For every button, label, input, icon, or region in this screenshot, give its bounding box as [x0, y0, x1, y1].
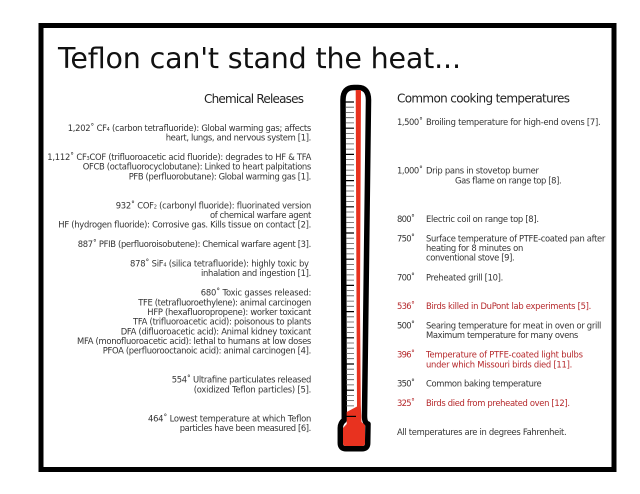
heading: cooking temperatures: Common cooking temperatures	[397, 92, 570, 106]
entry: 1,000 degrees	[397, 166, 562, 185]
footnote: All temperatures are in degrees Fahrenheit.	[397, 427, 567, 437]
entry: 554 degrees	[172, 375, 311, 394]
bottom tick on bulb	[346, 415, 356, 417]
entry: 1,112 degrees: OFCB (octafluorocyclobutane): Linked to heart palpitations	[83, 162, 311, 172]
entry: 680 degrees: DFA (difluoroacetic acid): Animal kidney toxicant	[121, 326, 312, 336]
entry: 750 degrees: conventional stove [9].	[426, 253, 515, 263]
entry: 396 degrees: 396˚	[397, 349, 415, 359]
entry: 932 degrees	[58, 200, 312, 230]
entry: 887 degrees: 887˚ PFIB (perfluoroisobutene): Chemical warfare agent [3].	[78, 239, 311, 249]
entry: 396 degrees	[397, 349, 583, 369]
entry: 750 degrees	[397, 233, 606, 263]
panel: common cooking temperatures	[397, 92, 606, 437]
entry: 500 degrees: Searing temperature for meat in oven or grill	[426, 320, 601, 330]
entry: 500 degrees: Maximum temperature for many ovens	[426, 330, 578, 340]
entry: 1,000 degrees: Drip pans in stovetop burner	[426, 166, 540, 176]
entry: 464 degrees: 464˚ Lowest temperature at which Teflon	[148, 413, 311, 423]
entry: 1,500 degrees: Broiling temperature for high-end ovens [7].	[426, 117, 601, 127]
entry: 700 degrees: 700˚	[397, 272, 415, 282]
entry: 750 degrees: heating for 8 minutes on	[426, 243, 523, 253]
entry: 680 degrees: TFA (trifluoroacetic acid): poisonous to plants	[132, 317, 311, 327]
entry: 932 degrees: of chemical warfare agent	[210, 210, 312, 220]
thermometer major ticks	[345, 102, 354, 390]
thermometer scale ticks	[346, 107, 354, 406]
entry: 350 degrees: 350˚	[397, 378, 415, 388]
entry: 554 degrees: 554˚ Ultrafine particulates released	[172, 375, 311, 385]
entry: 878 degrees	[130, 258, 311, 278]
entry: 325 degrees: 325˚	[397, 398, 415, 408]
entry: 680 degrees	[77, 288, 312, 356]
entry: 700 degrees: Preheated grill [10].	[426, 272, 503, 282]
entry: 800 degrees: 800˚	[397, 214, 415, 224]
entry: 680 degrees: TFE (tetrafluoroethylene): animal carcinogen	[137, 297, 311, 307]
entry: 1,202 degrees: heart, lungs, and nervous system [1].	[166, 132, 311, 142]
entry: 878 degrees: inhalation and ingestion [1].	[201, 268, 311, 278]
entry: 1,112 degrees: PFB (perfluorobutane): Global warming gas [1].	[129, 171, 311, 181]
entry: 396 degrees: Temperature of PTFE-coated light bulbs	[425, 349, 583, 359]
panel: chemical releases	[47, 92, 312, 433]
entry: 932 degrees: 932˚ COF2 (carbonyl fluoride): fluorinated version	[116, 200, 311, 210]
red mercury column	[343, 90, 365, 446]
entry: 1,000 degrees: Gas flame on range top [8].	[455, 175, 562, 185]
entry: 1,202 degrees: 1,202˚ CF4 (carbon tetrafluoride): Global warming gas; affects	[68, 123, 311, 133]
entry: 464 degrees	[148, 413, 311, 433]
entry: 680 degrees: HFP (hexafluoropropene): worker toxicant	[147, 307, 312, 317]
entry: 932 degrees: HF (hydrogen fluoride): Corrosive gas. Kills tissue on contact [2].	[58, 220, 311, 230]
entry: 1,112 degrees	[47, 152, 312, 181]
heading: chemical releases: Chemical Releases	[204, 92, 304, 106]
entry: 1,112 degrees: 1,112˚ CF3COF (trifluoroacetic acid fluoride): degrades to HF & TFA	[47, 152, 312, 162]
entry: 1,000 degrees: 1,000˚	[397, 166, 423, 176]
entry: 325 degrees: Birds died from preheated oven [12].	[426, 398, 570, 408]
entry: 1,202 degrees	[68, 123, 311, 142]
entry: 554 degrees: (oxidized Teflon particles) [5].	[194, 384, 311, 394]
entry: 680 degrees: MFA (monofluoroacetic acid): lethal to humans at low doses	[77, 336, 311, 346]
entry: 680 degrees: PFOA (perfluorooctanoic acid): animal carcinogen [4].	[103, 346, 311, 356]
entry: 750 degrees: Surface temperature of PTFE-coated pan after	[426, 233, 606, 243]
entry: 464 degrees: particles have been measured [6].	[180, 423, 311, 433]
entry: 350 degrees: Common baking temperature	[426, 378, 542, 388]
entry: 500 degrees: 500˚	[397, 320, 415, 330]
thermometer glass outline	[340, 88, 368, 449]
entry: 536 degrees: 536˚	[397, 301, 415, 311]
entry: 500 degrees	[397, 320, 601, 340]
title: Teflon can't stand the heat...	[57, 42, 461, 75]
entry: 680 degrees: 680˚ Toxic gasses released:	[201, 288, 311, 298]
entry: 878 degrees: 878˚ SiF4 (silica tetrafluoride): highly toxic by	[130, 258, 309, 268]
entry: 800 degrees: Electric coil on range top [8].	[426, 214, 539, 224]
entry: 536 degrees: Birds killed in DuPont lab experiments [5].	[426, 301, 591, 311]
icon: thermometer	[340, 88, 368, 449]
entry: 1,500 degrees: 1,500˚	[397, 117, 423, 127]
entry: 750 degrees: 750˚	[397, 233, 415, 243]
entry: 396 degrees: under which Missouri birds died [11].	[426, 359, 572, 369]
